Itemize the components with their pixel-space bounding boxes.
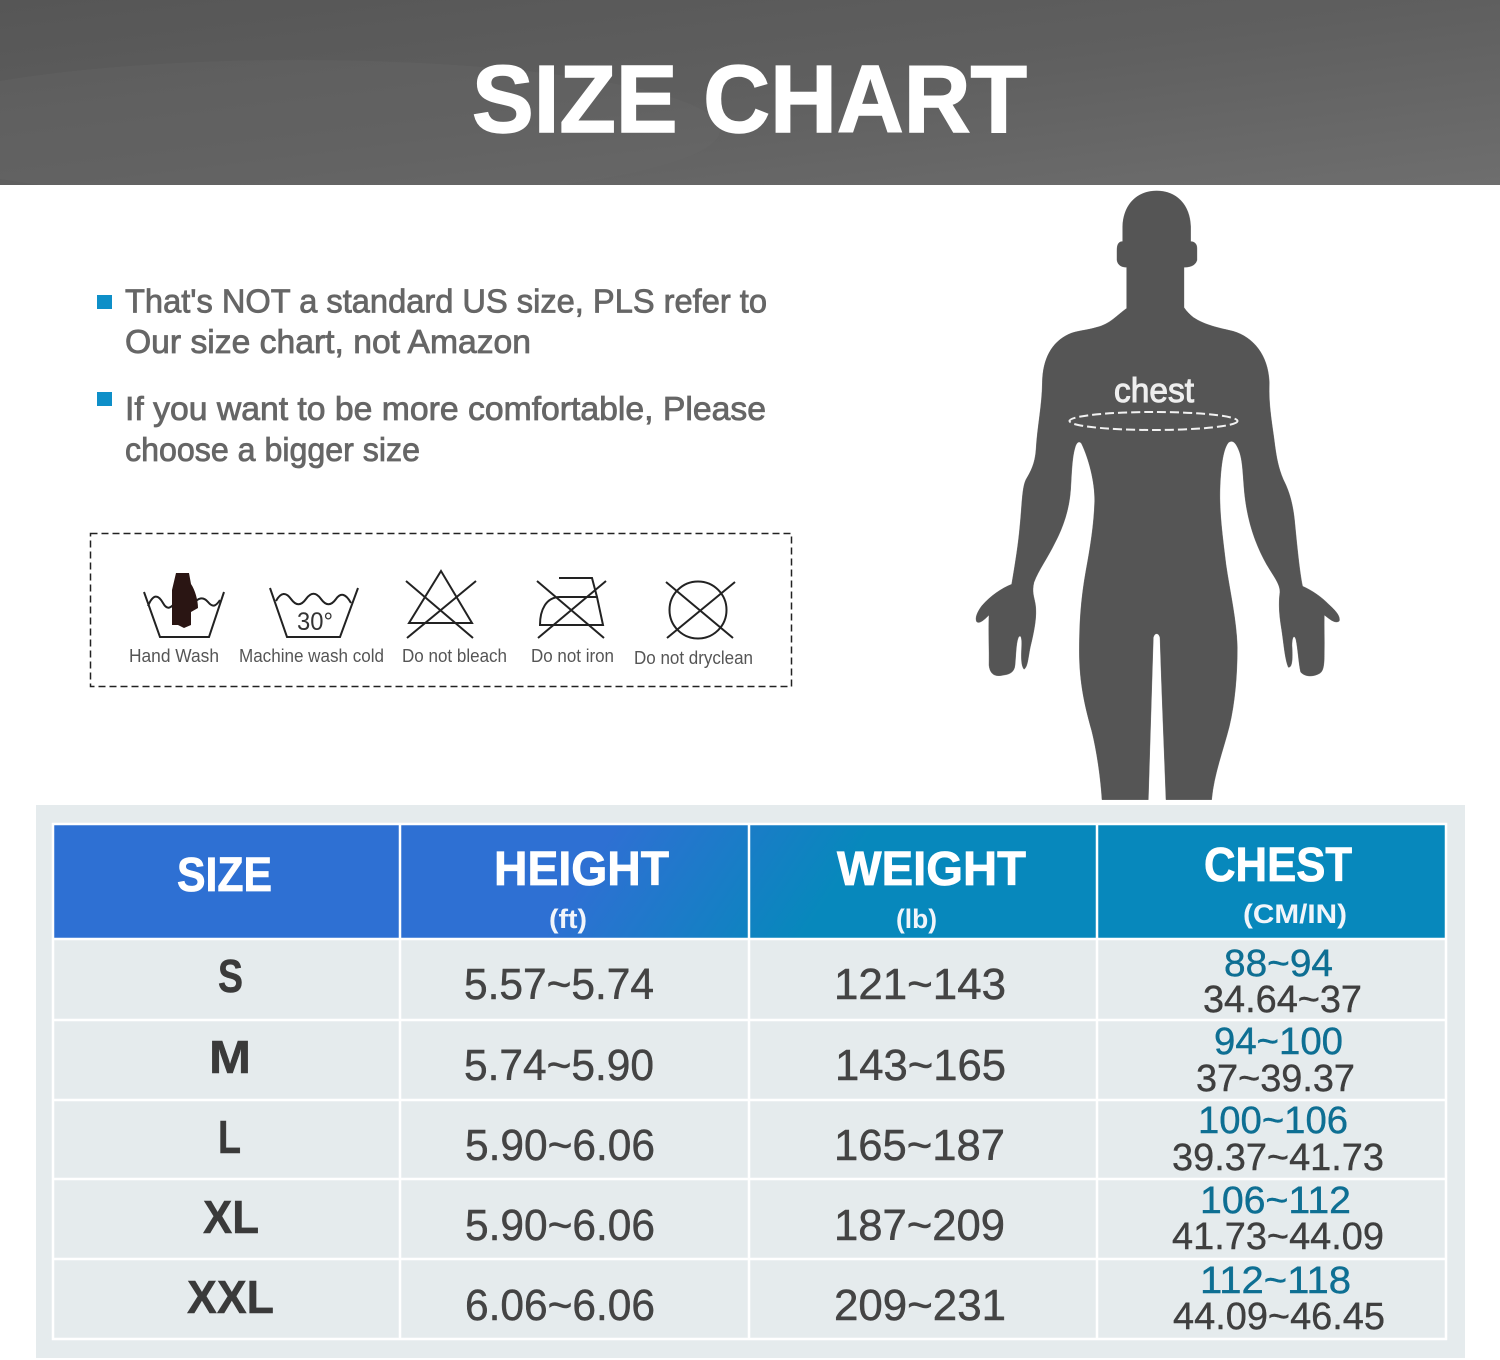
icon: do not bleach: Do not bleach xyxy=(402,646,507,666)
icon: machine wash cold xyxy=(239,588,384,666)
row: S: 5.57~5.74 xyxy=(464,960,654,1009)
row: XL: 41.73~44.09 xyxy=(1172,1216,1384,1258)
row: XXL xyxy=(187,1260,1385,1338)
row: XXL: 6.06~6.06 xyxy=(465,1281,655,1330)
table header: (lb) xyxy=(896,904,937,934)
table header xyxy=(53,824,1446,938)
row: S: 121~143 xyxy=(834,960,1006,1009)
icon: machine wash cold: Machine wash cold xyxy=(239,646,384,666)
row: XL: 187~209 xyxy=(834,1201,1005,1250)
row: S: 88~94 xyxy=(1224,943,1333,985)
title: SIZE CHART xyxy=(472,46,1027,153)
body silhouette with chest measure xyxy=(976,191,1339,800)
row: L: 100~106 xyxy=(1198,1100,1348,1142)
row: M xyxy=(209,1021,1355,1100)
row: XXL: 209~231 xyxy=(834,1281,1006,1330)
icon: hand wash: Hand Wash xyxy=(129,646,219,666)
icon: do not dryclean: Do not dryclean xyxy=(634,648,753,668)
row: S: S xyxy=(218,950,243,1002)
table header: HEIGHT xyxy=(494,843,669,896)
row: XL: XL xyxy=(203,1191,259,1243)
row: L: L xyxy=(218,1111,241,1163)
table header: WEIGHT xyxy=(837,843,1026,896)
icon: do not iron: Do not iron xyxy=(531,646,614,666)
icon: do not iron xyxy=(531,578,614,666)
panel: care instructions xyxy=(90,534,792,686)
row: XXL: 112~118 xyxy=(1200,1260,1351,1302)
icon: hand wash xyxy=(129,573,224,666)
table header: (CM/IN) xyxy=(1243,899,1347,929)
row: L xyxy=(218,1100,1384,1179)
row: M: 143~165 xyxy=(835,1041,1006,1090)
row: M: 5.74~5.90 xyxy=(464,1041,654,1090)
note: choose a bigger size: If you want to be more comfortable, Please xyxy=(125,390,766,427)
title banner xyxy=(0,0,1500,200)
row: M: 94~100 xyxy=(1214,1021,1343,1063)
row: XXL: 44.09~46.45 xyxy=(1173,1296,1385,1338)
panel: size table xyxy=(36,805,1465,1358)
table header: SIZE xyxy=(177,849,272,902)
icon: machine wash cold: 30° xyxy=(297,608,333,636)
note: not a standard US size: That's NOT a standard US size, PLS refer to xyxy=(125,282,767,320)
note: not a standard US size: Our size chart, not Amazon xyxy=(125,323,531,360)
icon: do not bleach xyxy=(402,571,507,666)
chest label: chest xyxy=(1114,372,1195,410)
row: S: 34.64~37 xyxy=(1203,979,1362,1021)
row: L: 39.37~41.73 xyxy=(1172,1137,1384,1179)
row: L: 165~187 xyxy=(834,1121,1005,1170)
table grid xyxy=(53,824,1446,1339)
table header: (ft) xyxy=(549,904,587,934)
table header: CHEST xyxy=(1204,839,1352,892)
note: not a standard US size xyxy=(97,282,767,360)
note: choose a bigger size xyxy=(97,390,766,468)
row: S xyxy=(218,943,1362,1021)
row: XL xyxy=(203,1180,1384,1258)
row: XL: 5.90~6.06 xyxy=(465,1201,655,1250)
row: M: M xyxy=(209,1031,251,1083)
chest measuring line xyxy=(1070,412,1238,430)
row: XL: 106~112 xyxy=(1200,1180,1351,1222)
icon: do not dryclean xyxy=(634,582,753,668)
row: XXL: XXL xyxy=(187,1271,274,1323)
row: M: 37~39.37 xyxy=(1196,1058,1355,1100)
note: choose a bigger size: choose a bigger size xyxy=(125,431,420,468)
row: L: 5.90~6.06 xyxy=(465,1121,655,1170)
